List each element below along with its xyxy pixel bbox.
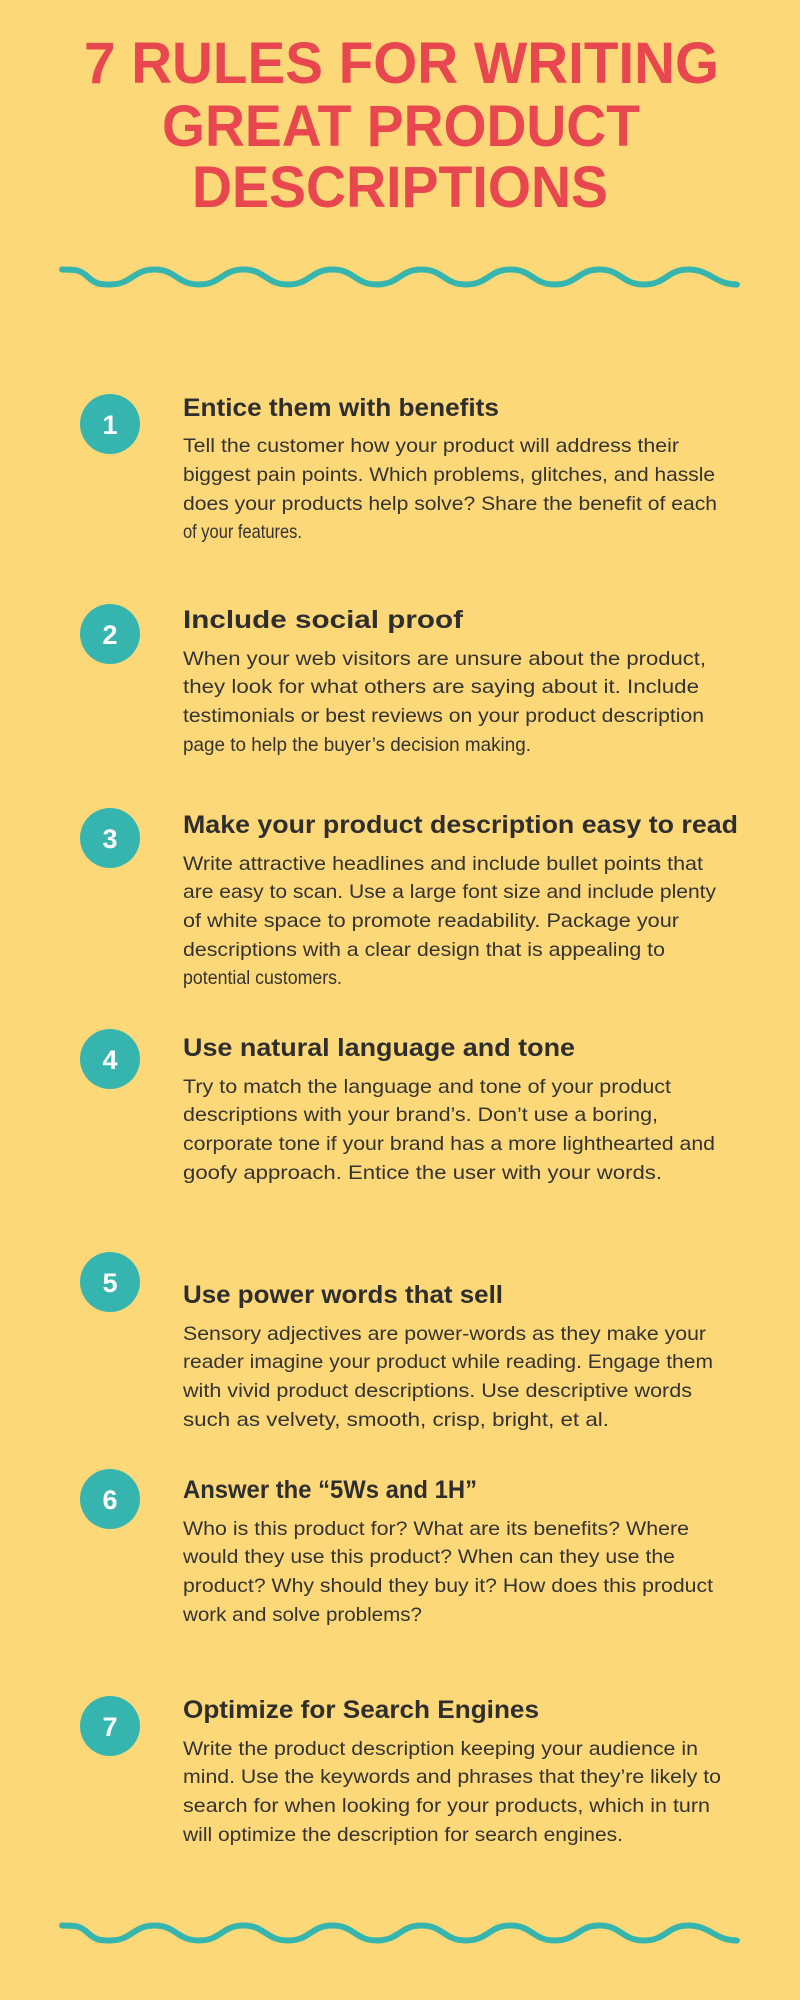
wave divider bottom xyxy=(62,1926,737,1940)
body 3: are easy to scan. Use a large font size and include plenty xyxy=(183,881,716,903)
icon: number 6: 6 xyxy=(102,1485,118,1515)
body 2: page to help the buyer’s decision making. xyxy=(183,734,531,756)
body 5: with vivid product descriptions. Use descriptive words xyxy=(182,1380,692,1402)
body 3: descriptions with a clear design that is appealing to xyxy=(183,939,665,961)
rule 4 xyxy=(80,1029,715,1184)
body 6: Who is this product for? What are its benefits? Where xyxy=(183,1518,689,1540)
rule 2 xyxy=(80,604,706,756)
body 5: reader imagine your product while reading. Engage them xyxy=(183,1351,713,1373)
title: GREAT PRODUCT xyxy=(162,94,640,159)
body 6: product? Why should they buy it? How does this product xyxy=(183,1575,714,1597)
body 2 xyxy=(183,648,706,756)
body 2: they look for what others are saying about it. Include xyxy=(183,676,699,698)
icon: number 1 xyxy=(80,394,140,454)
body 4: goofy approach. Entice the user with your words. xyxy=(183,1162,662,1184)
title: DESCRIPTIONS xyxy=(192,155,608,220)
body 1: Tell the customer how your product will address their xyxy=(183,435,680,457)
heading 4: Use natural language and tone xyxy=(183,1034,575,1062)
body 3: Write attractive headlines and include bullet points that xyxy=(183,853,704,875)
body 7 xyxy=(182,1738,721,1846)
icon: number 3: 3 xyxy=(102,824,118,854)
body 7: search for when looking for your products, which in turn xyxy=(183,1795,710,1817)
body 4: corporate tone if your brand has a more lighthearted and xyxy=(183,1133,715,1155)
icon: number 2 xyxy=(80,604,140,664)
icon: number 7 xyxy=(80,1696,140,1756)
body 2: testimonials or best reviews on your product description xyxy=(183,705,704,727)
rule 5 xyxy=(80,1252,713,1431)
body 1 xyxy=(183,435,717,543)
body 3 xyxy=(183,853,716,989)
icon: number 4 xyxy=(80,1029,140,1089)
title xyxy=(84,31,719,220)
icon: number 5 xyxy=(80,1252,140,1312)
body 2: When your web visitors are unsure about the product, xyxy=(183,648,706,670)
icon: number 2: 2 xyxy=(102,620,118,650)
body 1: biggest pain points. Which problems, glitches, and hassle xyxy=(183,464,715,486)
body 5: Sensory adjectives are power-words as they make your xyxy=(183,1323,707,1345)
body 4: descriptions with your brand’s. Don’t use a boring, xyxy=(183,1104,658,1126)
heading 5: Use power words that sell xyxy=(183,1281,503,1309)
title: 7 RULES FOR WRITING xyxy=(84,31,719,96)
icon: number 7: 7 xyxy=(102,1712,118,1742)
body 7: mind. Use the keywords and phrases that they’re likely to xyxy=(183,1766,721,1788)
body 6: work and solve problems? xyxy=(182,1604,422,1626)
heading 7: Optimize for Search Engines xyxy=(183,1696,539,1724)
icon: number 1: 1 xyxy=(102,410,118,440)
body 5: such as velvety, smooth, crisp, bright, et al. xyxy=(183,1409,609,1431)
body 3: of white space to promote readability. Package your xyxy=(183,910,680,932)
body 6: would they use this product? When can they use the xyxy=(182,1546,675,1568)
rule 6 xyxy=(80,1469,714,1626)
heading 1: Entice them with benefits xyxy=(183,394,499,422)
icon: number 3 xyxy=(80,808,140,868)
heading 6: Answer the “5Ws and 1H” xyxy=(183,1476,477,1504)
body 7: Write the product description keeping your audience in xyxy=(183,1738,698,1760)
body 1: of your features. xyxy=(183,521,302,543)
icon: number 6 xyxy=(80,1469,140,1529)
body 1: does your products help solve? Share the benefit of each xyxy=(183,493,717,515)
heading 2: Include social proof xyxy=(183,606,464,634)
heading 3: Make your product description easy to read xyxy=(183,811,738,839)
rule 1 xyxy=(80,394,717,543)
body 3: potential customers. xyxy=(183,967,342,989)
body 4 xyxy=(183,1076,715,1184)
icon: number 4: 4 xyxy=(102,1045,118,1075)
wave divider top xyxy=(62,270,737,284)
rule 3 xyxy=(80,808,738,989)
body 7: will optimize the description for search engines. xyxy=(182,1824,623,1846)
body 6 xyxy=(182,1518,714,1626)
rule 7 xyxy=(80,1696,721,1846)
body 5 xyxy=(182,1323,713,1431)
icon: number 5: 5 xyxy=(102,1268,118,1298)
body 4: Try to match the language and tone of your product xyxy=(183,1076,672,1098)
